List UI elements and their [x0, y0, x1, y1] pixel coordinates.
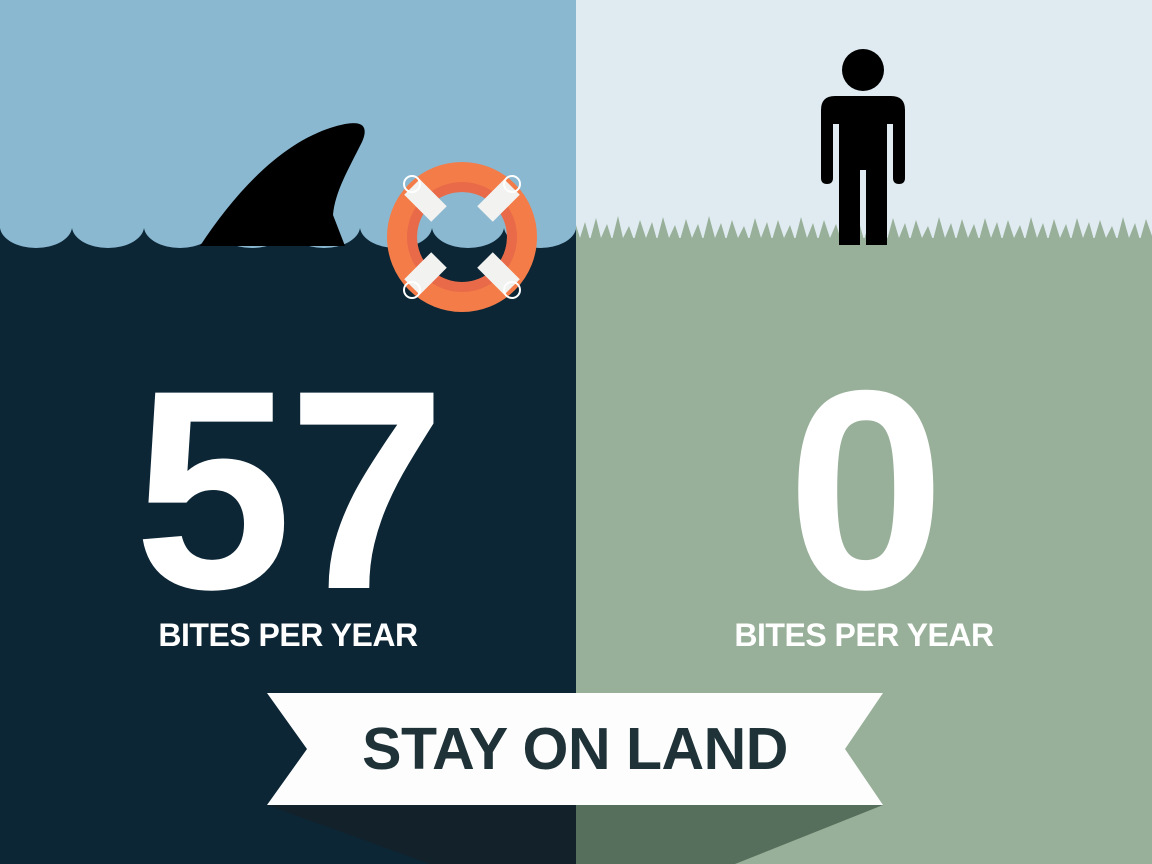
grass — [576, 216, 1152, 250]
icon: person — [821, 49, 905, 245]
label: bites per year left: BITES PER YEAR — [158, 617, 418, 653]
label: bites per year right: BITES PER YEAR — [734, 617, 994, 653]
banner shadow — [267, 805, 883, 864]
icon: shark fin — [200, 123, 365, 246]
banner text: STAY ON LAND — [362, 716, 788, 782]
banner: stay on land — [267, 693, 883, 805]
icon: lifebuoy — [402, 176, 522, 298]
number: 0: 0 — [787, 332, 941, 649]
sky with wave scallops — [0, 0, 576, 248]
number: 57: 57 — [134, 332, 442, 649]
